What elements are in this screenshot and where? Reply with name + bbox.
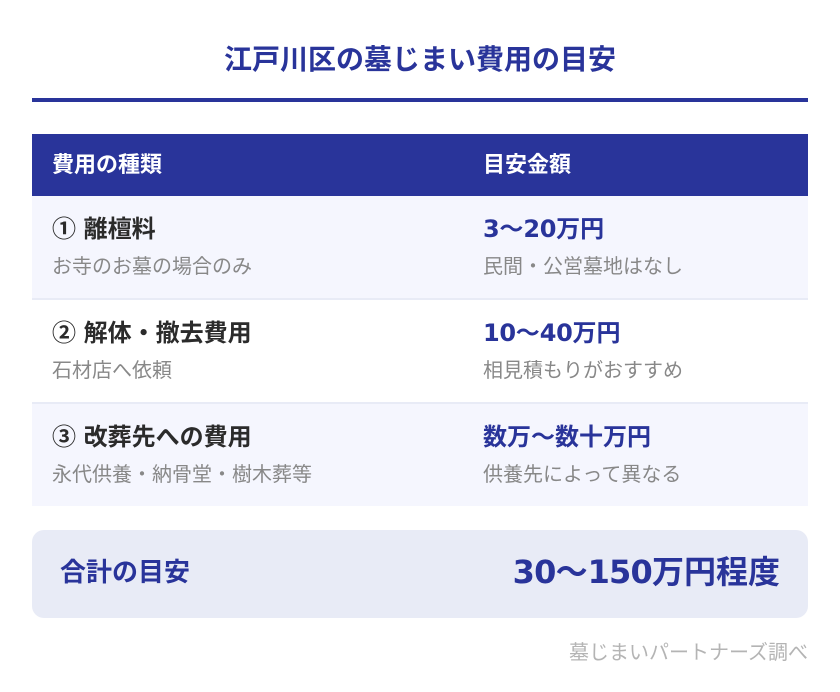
title underline xyxy=(32,98,808,102)
header: estimated amount: 目安金額 xyxy=(483,152,571,177)
total label: 合計の目安 xyxy=(60,557,190,587)
row 1 note: お寺のお墓の場合のみ xyxy=(52,256,252,278)
row 2 price: 10～40万円 xyxy=(483,319,620,347)
source note: 墓じまいパートナーズ調べ xyxy=(569,642,808,664)
row 3 price note: 供養先によって異なる xyxy=(483,464,681,486)
row 1 price note: 民間・公営墓地はなし xyxy=(483,256,683,278)
row 1 xyxy=(32,196,808,300)
table header xyxy=(32,134,808,196)
title: 江戸川区の墓じまい費用の目安 xyxy=(224,44,616,75)
row 2 price note: 相見積もりがおすすめ xyxy=(483,360,683,382)
total panel xyxy=(32,530,808,618)
row 1 price: 3～20万円 xyxy=(483,215,604,243)
row 3 xyxy=(32,404,808,506)
total amount: 30～150万円程度 xyxy=(513,553,780,591)
row 3 note: 永代供養・納骨堂・樹木葬等 xyxy=(52,464,312,486)
row 2 note: 石材店へ依頼 xyxy=(52,360,172,382)
table xyxy=(32,134,808,506)
row 2 name: ② 解体・撤去費用 xyxy=(52,320,252,347)
row 3 name: ③ 改葬先への費用 xyxy=(52,424,252,451)
row 1 name: ① 離檀料 xyxy=(52,216,156,243)
row 2 xyxy=(32,300,808,404)
row 3 price: 数万～数十万円 xyxy=(483,423,651,451)
header: cost type: 費用の種類 xyxy=(52,152,162,177)
